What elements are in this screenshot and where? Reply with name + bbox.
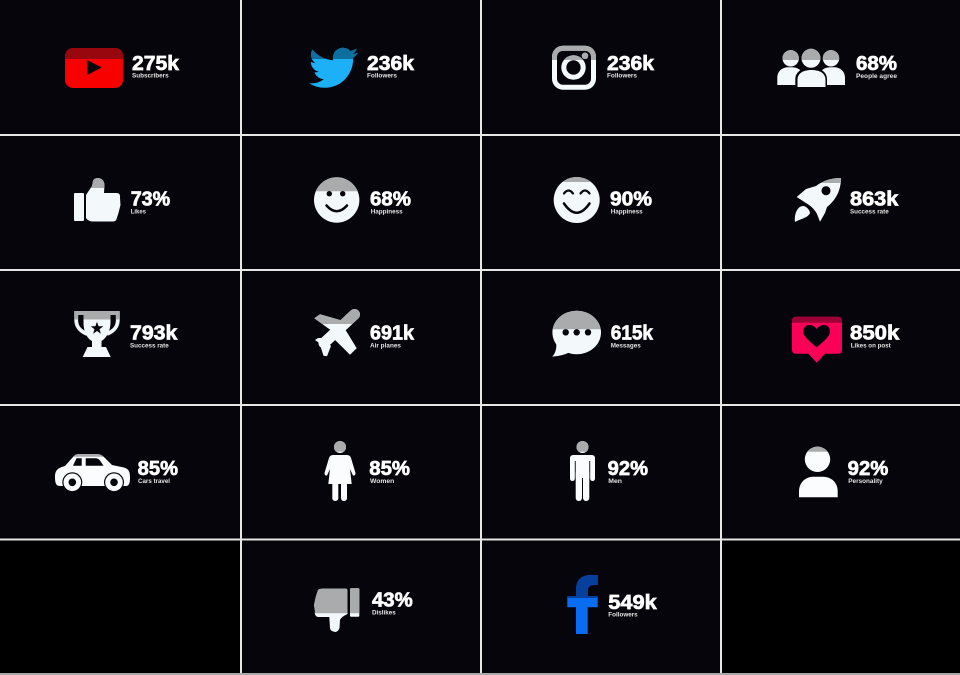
panel: instagram followers: [482, 0, 720, 135]
value: 92%: [848, 458, 889, 480]
panel: trophy success rate: [0, 271, 240, 404]
icon: car: [55, 454, 130, 492]
icon: smiley: [314, 177, 359, 223]
icon: facebook f: [567, 575, 598, 634]
value: 92%: [608, 458, 648, 480]
icon: group of people: [777, 49, 845, 87]
icon: chat bubble: [552, 311, 601, 357]
icon: heart notification: [792, 317, 842, 363]
icon: trophy: [76, 311, 118, 357]
value: 549k: [608, 592, 658, 614]
label: Happiness: [611, 208, 643, 216]
label: Women: [370, 478, 394, 485]
label: Cars travel: [138, 478, 170, 485]
label: Dislikes: [372, 610, 396, 616]
label: Followers: [607, 72, 637, 80]
icon: woman: [324, 441, 356, 501]
panel: men: [482, 406, 720, 538]
panel: people agree: [722, 0, 960, 135]
panel: rocket success rate: [722, 136, 960, 269]
value: 236k: [367, 53, 415, 75]
label: Likes on post: [851, 342, 892, 350]
panel: happiness 68: [242, 136, 480, 269]
panel: youtube subscribers: [0, 0, 240, 135]
value: 850k: [850, 322, 900, 344]
value: 691k: [370, 322, 415, 344]
icon: thumbs down: [314, 588, 359, 632]
panel: happiness 90: [482, 136, 720, 269]
panel: dislikes: [242, 541, 480, 673]
value: 90%: [610, 189, 652, 211]
label: Likes: [131, 208, 146, 216]
label: Followers: [608, 612, 638, 618]
panel: likes: [0, 136, 240, 269]
value: 85%: [369, 458, 410, 480]
icon: youtube: [65, 48, 123, 88]
label: Success rate: [850, 208, 889, 216]
label: Followers: [367, 72, 397, 80]
icon: smiley with closed eyes: [554, 177, 600, 223]
value: 236k: [607, 53, 655, 75]
value: 43%: [372, 590, 413, 612]
label: Happiness: [371, 208, 403, 216]
value: 275k: [132, 53, 180, 75]
panel: facebook followers: [482, 541, 720, 673]
panel: air planes: [242, 271, 480, 404]
panel: women: [242, 406, 480, 538]
label: Subscribers: [132, 72, 169, 80]
value: 615k: [611, 322, 654, 344]
panel: messages: [482, 271, 720, 404]
panel: personality: [722, 406, 960, 538]
icon: twitter bird: [309, 48, 358, 88]
label: Messages: [611, 342, 641, 350]
label: People agree: [856, 73, 897, 80]
value: 85%: [138, 458, 178, 480]
value: 793k: [130, 322, 178, 344]
icon: rocket: [795, 178, 841, 222]
label: Men: [608, 478, 622, 485]
icon: man: [570, 441, 595, 501]
value: 73%: [131, 189, 170, 211]
label: Air planes: [370, 342, 401, 350]
label: Personality: [848, 478, 883, 485]
icon: thumbs up: [74, 178, 120, 222]
panel: twitter followers: [242, 0, 480, 135]
value: 68%: [370, 189, 411, 211]
label: Success rate: [130, 342, 169, 350]
panel: likes on post: [722, 271, 960, 404]
value: 68%: [856, 53, 897, 75]
icon: airplane: [314, 314, 357, 356]
icon: instagram: [552, 46, 596, 90]
value: 863k: [850, 189, 899, 211]
icon: person: [799, 447, 838, 497]
panel: cars travel: [0, 406, 240, 538]
